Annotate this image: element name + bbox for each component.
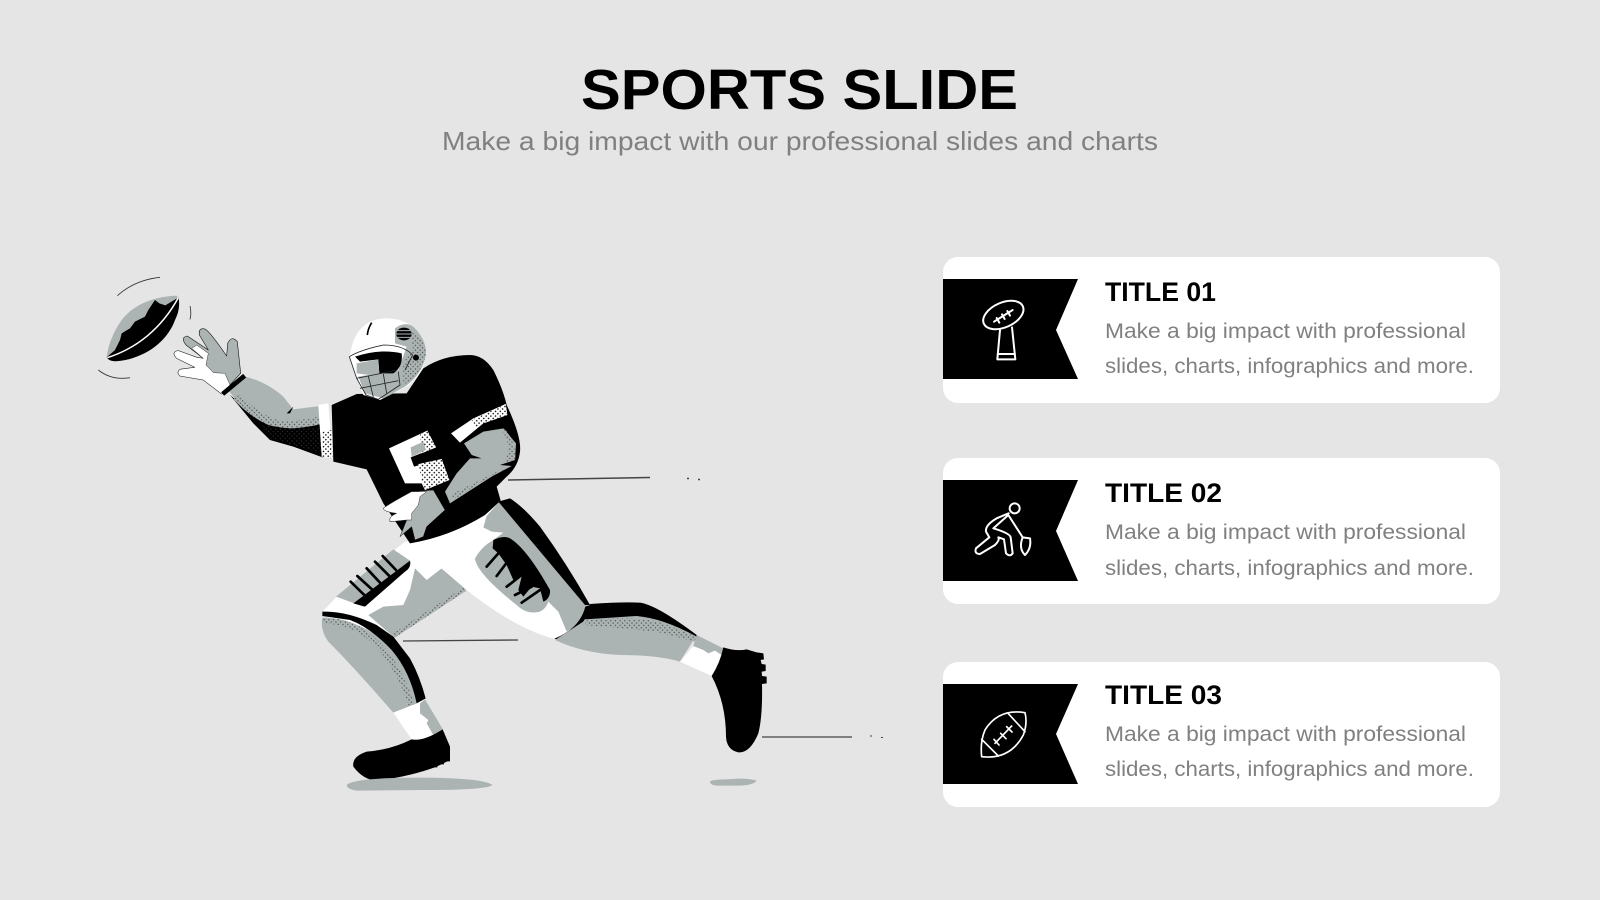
ribbon 01 bbox=[943, 279, 1078, 379]
right arm bbox=[437, 428, 516, 508]
jersey number bbox=[389, 431, 449, 490]
card 01 text bbox=[1105, 319, 1474, 378]
ribbon 02 bbox=[943, 480, 1078, 581]
card 03 text: slides, charts, infographics and more. bbox=[1105, 757, 1474, 781]
rear lower leg and cleat bbox=[555, 602, 767, 752]
subtitle: Make a big impact with our professional slides and charts bbox=[442, 126, 1158, 156]
card 02 text: Make a big impact with professional bbox=[1105, 520, 1466, 544]
panel: card 03 bbox=[943, 662, 1500, 807]
shadow: front foot bbox=[347, 778, 492, 791]
card 01 text: slides, charts, infographics and more. bbox=[1105, 354, 1474, 378]
sleeve band: left bbox=[318, 403, 333, 458]
panel: card 02 bbox=[943, 458, 1500, 604]
sleeve band: right bbox=[451, 404, 507, 443]
title: SPORTS SLIDE bbox=[581, 58, 1018, 122]
jersey bbox=[318, 318, 520, 543]
card 03 text bbox=[1105, 722, 1474, 781]
helmet bbox=[349, 318, 426, 400]
card 02 title: TITLE 02 bbox=[1105, 478, 1222, 508]
icon: football trophy bbox=[979, 295, 1028, 359]
card 01 title: TITLE 01 bbox=[1105, 277, 1216, 307]
ribbon 03 bbox=[943, 684, 1078, 784]
card 02 text: slides, charts, infographics and more. bbox=[1105, 556, 1474, 580]
card 03 text: Make a big impact with professional bbox=[1105, 722, 1466, 746]
shadow: rear foot bbox=[710, 779, 757, 786]
icon: player with ball bbox=[975, 503, 1030, 555]
sleeve band: left halftone bbox=[322, 430, 333, 458]
speed lines bbox=[403, 478, 883, 738]
illustration: football player catching ball bbox=[98, 277, 883, 791]
sleeve band: right halftone bbox=[472, 404, 507, 427]
extended arm and hand bbox=[174, 329, 323, 457]
card 02 text bbox=[1105, 520, 1474, 580]
football in flight bbox=[98, 277, 191, 378]
card 03 title: TITLE 03 bbox=[1105, 680, 1222, 710]
panel: card 01 bbox=[943, 257, 1500, 403]
lower hand bbox=[383, 490, 445, 540]
card 01 text: Make a big impact with professional bbox=[1105, 319, 1466, 343]
legs and shorts bbox=[322, 498, 590, 781]
icon: football bbox=[981, 712, 1026, 757]
